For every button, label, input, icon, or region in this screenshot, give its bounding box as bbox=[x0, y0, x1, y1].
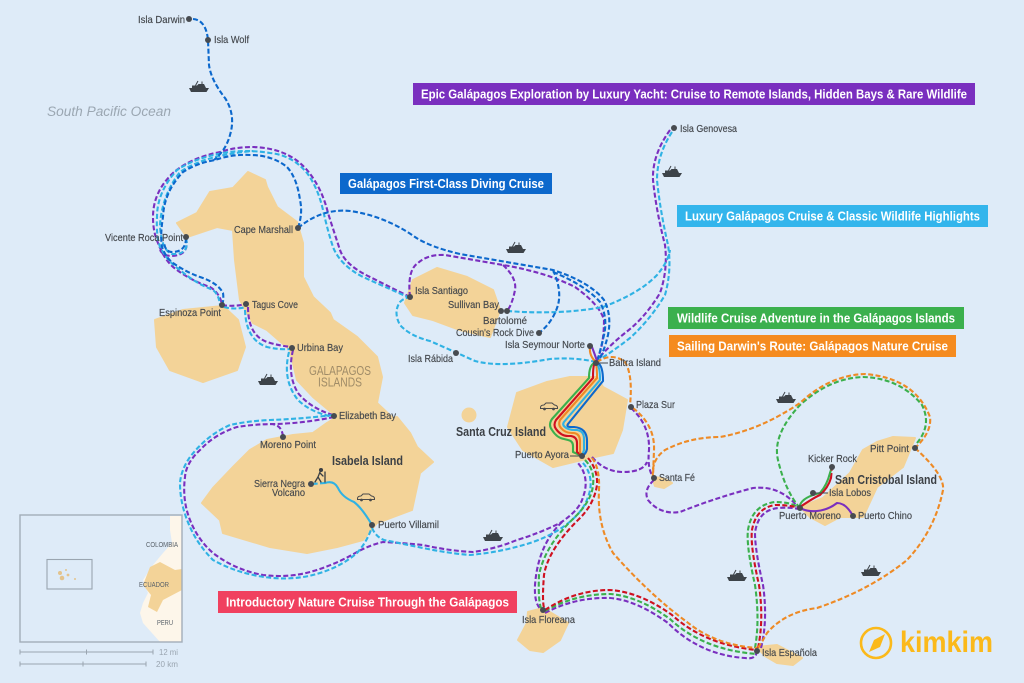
legend label: Luxury Cruise bbox=[677, 205, 988, 227]
island: Pinzon bbox=[462, 408, 476, 422]
icon: compass bbox=[861, 628, 891, 658]
island: Santa Cruz bbox=[508, 377, 627, 467]
text: place labels: Isla Seymour Norte bbox=[505, 340, 585, 351]
island: Floreana bbox=[518, 608, 568, 652]
icons: boats bbox=[189, 81, 881, 581]
text: place labels: Puerto Ayora bbox=[515, 450, 569, 461]
inset: Galapagos locator box bbox=[47, 560, 92, 589]
solid overland routes bbox=[325, 347, 853, 525]
legend label: First-Class Diving bbox=[340, 173, 552, 194]
island: Santa Fe bbox=[652, 477, 672, 488]
location dots bbox=[183, 16, 918, 654]
inset: Ecuador bbox=[143, 562, 182, 612]
text: place labels: Tagus Cove bbox=[252, 300, 298, 311]
island: San Cristobal bbox=[800, 437, 915, 525]
text: place labels: Isla Wolf bbox=[214, 35, 249, 46]
overland: Santa Cruz rainbow bbox=[550, 363, 603, 456]
text: place labels: Isla Lobos bbox=[829, 488, 871, 499]
legend label: Wildlife Cruise Adventure: Wildlife Cruise Adventure in the Galápagos Islands bbox=[677, 310, 955, 326]
route: Epic exploration (purple) bbox=[153, 130, 799, 658]
island: Espanola bbox=[757, 645, 802, 665]
island: Isabela bbox=[177, 172, 433, 553]
overland: San Cristobal bbox=[800, 473, 853, 516]
text: place labels: Isla Santiago bbox=[415, 286, 468, 297]
text: place labels: Puerto Moreno bbox=[779, 511, 841, 522]
text: place labels: Isla Rábida bbox=[408, 354, 453, 365]
route: Sailing Darwin's route (orange) bbox=[592, 357, 943, 648]
inset: mainland bbox=[140, 516, 182, 642]
text: place labels: Puerto Villamil bbox=[378, 520, 439, 531]
legend label: Epic Galapagos Exploration: Epic Galápagos Exploration by Luxury Yacht: Cruise to Remote Islands, Hidden Bays & Rare Wildlife bbox=[421, 86, 967, 102]
logo: kimkim: kimkim bbox=[900, 626, 993, 659]
text: major island names: Isabela Island bbox=[332, 454, 403, 468]
text: place labels: Santa Fé bbox=[659, 473, 695, 484]
text: place labels: Baltra Island bbox=[609, 358, 661, 369]
region label: Galapagos Islands: GALAPAGOS bbox=[309, 363, 371, 378]
text: place labels: Pitt Point bbox=[870, 444, 909, 455]
region label: Galapagos Islands bbox=[309, 363, 371, 390]
text: place labels: Sierra Negra bbox=[254, 479, 305, 490]
text: place labels: Bartolomé bbox=[483, 316, 527, 327]
panel: island landmasses bbox=[155, 172, 915, 665]
text: place labels: Plaza Sur bbox=[636, 400, 675, 411]
inset: country names: PERU bbox=[157, 618, 173, 627]
scale bars bbox=[20, 647, 178, 669]
icon: hikers bbox=[315, 469, 325, 482]
text: South Pacific Ocean: South Pacific Ocean bbox=[47, 104, 171, 119]
icons: cars bbox=[358, 403, 558, 501]
text: place labels: Puerto Chino bbox=[858, 511, 912, 522]
text: major island names: Santa Cruz Island bbox=[456, 425, 546, 439]
leader lines bbox=[570, 363, 828, 493]
route: First-class diving (dark blue) bbox=[161, 19, 609, 362]
island: Fernandina bbox=[155, 306, 245, 382]
inset: country names: ECUADOR bbox=[139, 580, 169, 589]
scale bars: 20 km bbox=[156, 659, 178, 669]
text: place labels: Isla Genovesa bbox=[680, 124, 737, 135]
text: major island names bbox=[332, 425, 937, 487]
text: place labels bbox=[105, 15, 912, 659]
route: Luxury classic highlights (light blue) bbox=[157, 132, 672, 578]
text: place labels: Cousin's Rock Dive bbox=[456, 328, 534, 339]
panel: locator inset map bbox=[20, 515, 182, 642]
scale bars: 12 mi bbox=[159, 647, 178, 657]
legend label: First-Class Diving: Galápagos First-Class Diving Cruise bbox=[348, 176, 544, 191]
overland: Seymour to Baltra bbox=[590, 347, 597, 362]
legend label: Luxury Cruise: Luxury Galápagos Cruise & Classic Wildlife Highlights bbox=[685, 208, 980, 224]
inset: country names: COLOMBIA bbox=[146, 540, 178, 549]
text: major island names: San Cristobal Island bbox=[835, 473, 937, 487]
region label: Galapagos Islands: ISLANDS bbox=[318, 374, 362, 390]
text: place labels: Kicker Rock bbox=[808, 454, 858, 465]
text: place labels: Moreno Point bbox=[260, 440, 316, 451]
legend label: Introductory Nature Cruise: Introductory Nature Cruise Through the Galápagos bbox=[226, 594, 509, 610]
text: place labels: Volcano bbox=[272, 488, 305, 499]
legend label: Wildlife Cruise Adventure bbox=[668, 307, 964, 329]
logo: kimkim bbox=[861, 626, 993, 659]
route: Introductory nature (red) bbox=[543, 458, 832, 650]
text: place labels: Sullivan Bay bbox=[448, 300, 500, 311]
inset: frame bbox=[20, 515, 182, 642]
legend label: Introductory Nature Cruise bbox=[218, 591, 517, 613]
text: place labels: Urbina Bay bbox=[297, 343, 344, 354]
text: place labels: Isla Española bbox=[762, 648, 817, 659]
legend label: Sailing Darwin's Route bbox=[669, 335, 956, 357]
text: place labels: Espinoza Point bbox=[159, 308, 221, 319]
inset: tiny islands bbox=[58, 569, 76, 580]
text: place labels: Isla Darwin bbox=[138, 15, 185, 26]
text: place labels: Isla Floreana bbox=[522, 615, 575, 626]
legend label: Epic Galapagos Exploration bbox=[413, 83, 975, 105]
overland: Sierra Negra bbox=[325, 482, 372, 525]
legend label: Sailing Darwin's Route: Sailing Darwin's Route: Galápagos Nature Cruise bbox=[677, 338, 948, 354]
text: place labels: Vicente Roca Point bbox=[105, 233, 183, 244]
text: place labels: Cape Marshall bbox=[234, 225, 293, 236]
route: Wildlife adventure (green) bbox=[539, 377, 926, 654]
text: place labels: Elizabeth Bay bbox=[339, 411, 397, 422]
island: Santiago bbox=[405, 268, 500, 337]
inset: country names bbox=[139, 540, 178, 627]
